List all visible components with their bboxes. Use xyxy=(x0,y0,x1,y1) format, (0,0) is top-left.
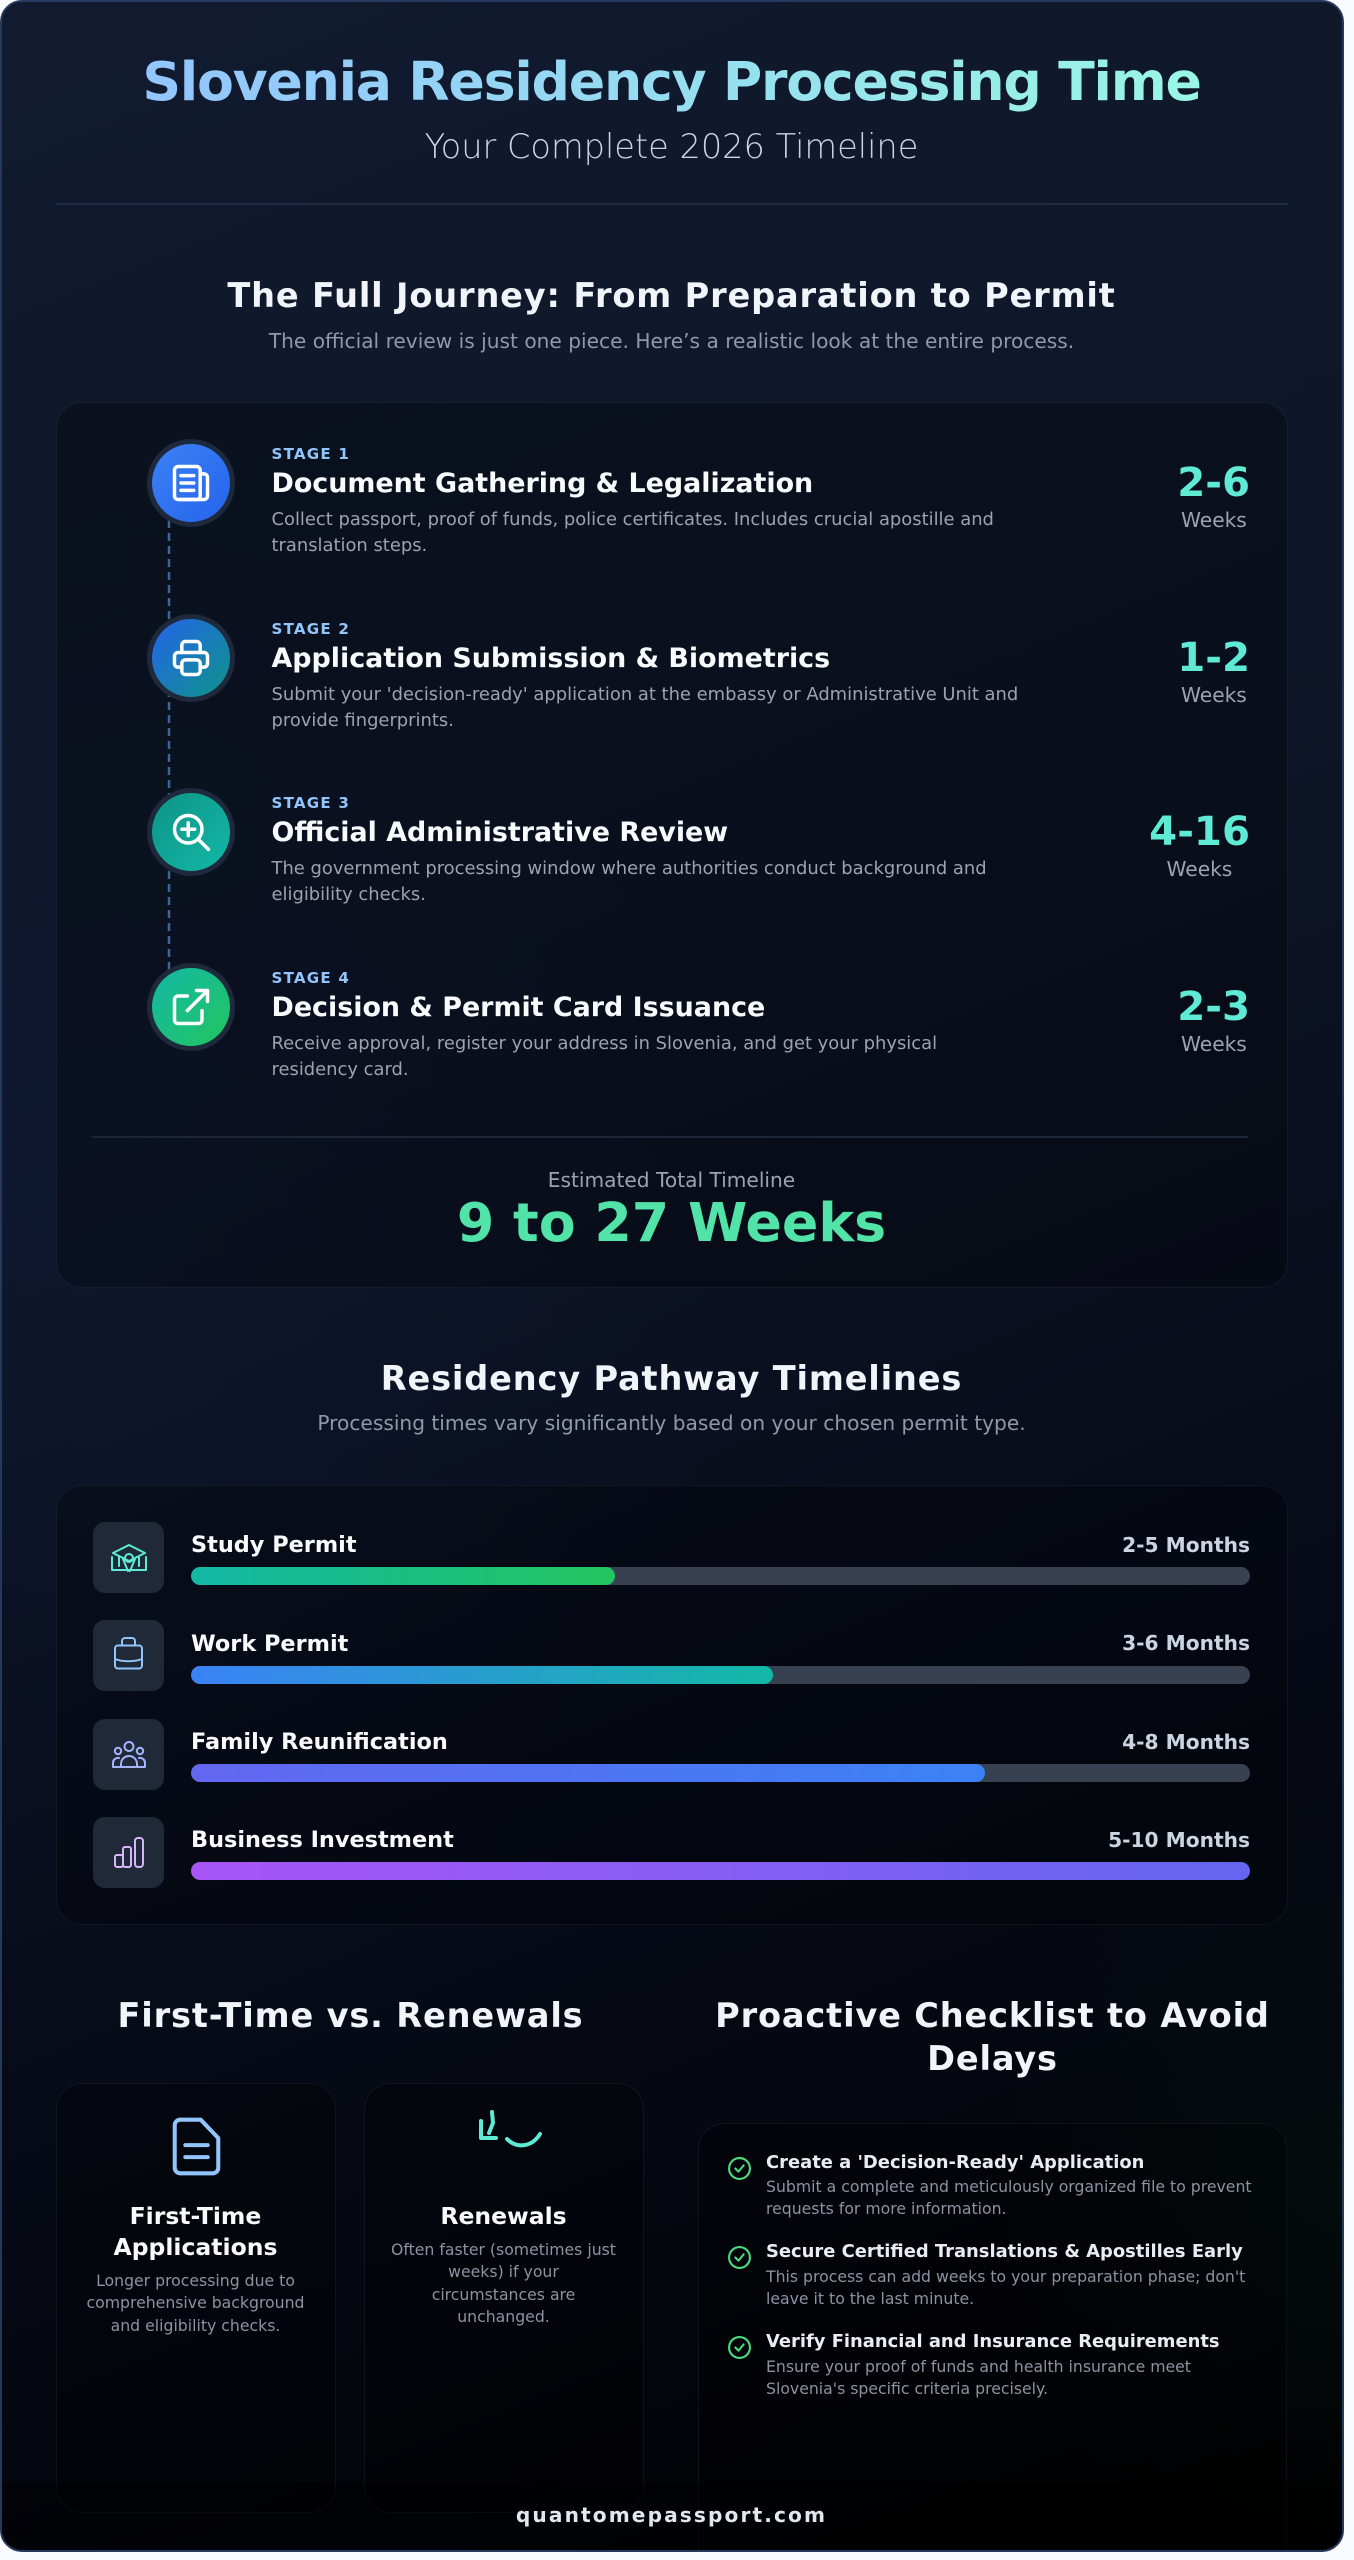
icon: people xyxy=(92,1718,164,1790)
stage description: residency card. xyxy=(272,1059,409,1080)
stage title: Document Gathering & Legalization xyxy=(272,468,813,499)
card description: circumstances are xyxy=(432,2284,575,2304)
panel: renewals xyxy=(364,2082,644,2512)
icon: check xyxy=(728,2336,751,2359)
item description: Slovenia's specific criteria precisely. xyxy=(766,2379,1048,2398)
item description: Submit a complete and meticulously organized file to prevent xyxy=(766,2177,1252,2196)
pathway duration: 3-6 Months xyxy=(1122,1631,1250,1655)
item description: This process can add weeks to your preparation phase; don't xyxy=(766,2266,1245,2286)
check item 1 xyxy=(728,2152,1252,2218)
stage duration: 2-3 xyxy=(1177,982,1250,1030)
stage label: STAGE 1 xyxy=(272,445,350,463)
title: Slovenia Residency Processing Time xyxy=(142,50,1201,112)
icon: check xyxy=(728,2157,751,2180)
stage 2 xyxy=(147,614,1250,731)
icon: graduation cap xyxy=(92,1522,164,1592)
progress bar xyxy=(191,1862,1250,1880)
card description: weeks) if your xyxy=(448,2262,559,2281)
pathway duration: 5-10 Months xyxy=(1108,1828,1250,1852)
total label: Estimated Total Timeline xyxy=(548,1168,795,1192)
icon: bar chart xyxy=(92,1816,164,1888)
stage description xyxy=(271,858,987,905)
icon: external link xyxy=(146,962,234,1050)
icon: printer xyxy=(146,614,234,702)
stage description: Submit your 'decision-ready' application at the embassy or Administrative Unit and xyxy=(272,684,1018,704)
total value: 9 to 27 Weeks xyxy=(457,1190,886,1254)
pathway: work xyxy=(93,1620,1250,1691)
card description xyxy=(391,2240,616,2326)
stage description: eligibility checks. xyxy=(272,884,426,905)
stage description: Receive approval, register your address in Slovenia, and get your physical xyxy=(272,1032,937,1054)
timeline connector xyxy=(168,520,170,970)
item description: Ensure your proof of funds and health insurance meet xyxy=(766,2356,1191,2376)
item description xyxy=(766,2177,1252,2218)
subtitle: Your Complete 2026 Timeline xyxy=(425,127,918,166)
stage description xyxy=(272,684,1018,731)
icon: magnifier xyxy=(146,788,234,876)
pathway: family xyxy=(93,1719,1250,1790)
item title: Verify Financial and Insurance Requirements xyxy=(766,2331,1220,2352)
progress bar xyxy=(191,1567,1250,1585)
pathway duration: 2-5 Months xyxy=(1122,1532,1250,1556)
icon: file xyxy=(172,2118,220,2176)
card description: unchanged. xyxy=(457,2307,550,2326)
icon: check xyxy=(728,2246,751,2269)
duration unit: Weeks xyxy=(1181,1032,1247,1056)
stage label: STAGE 4 xyxy=(272,969,350,987)
duration unit: Weeks xyxy=(1166,856,1232,880)
card description: and eligibility checks. xyxy=(111,2316,280,2334)
stage title: Official Administrative Review xyxy=(272,817,728,848)
check item 2 xyxy=(728,2241,1245,2308)
card title xyxy=(114,2202,277,2261)
stage description: Collect passport, proof of funds, police certificates. Includes crucial apostille and xyxy=(272,508,994,530)
item description xyxy=(766,2266,1245,2308)
panel: checklist xyxy=(698,2122,1287,2560)
card title: Applications xyxy=(114,2233,277,2261)
card description: comprehensive background xyxy=(86,2293,304,2312)
icon: broken refresh xyxy=(479,2110,542,2148)
pathway duration: 4-8 Months xyxy=(1122,1730,1250,1754)
progress bar xyxy=(191,1666,1250,1684)
pathway label: Business Investment xyxy=(191,1827,454,1853)
heading: first-time vs renewals: First-Time vs. Renewals xyxy=(117,1996,584,2034)
duration unit: Weeks xyxy=(1181,682,1247,706)
heading: proactive checklist: Delays xyxy=(927,2038,1058,2078)
stage description: The government processing window where authorities conduct background and xyxy=(272,858,987,878)
duration unit: Weeks xyxy=(1181,508,1247,532)
heading: proactive checklist xyxy=(715,1996,1270,2078)
item description xyxy=(766,2356,1191,2398)
header divider xyxy=(56,203,1288,205)
stage 3 xyxy=(147,788,1250,905)
heading: pathways: Residency Pathway Timelines xyxy=(381,1359,962,1398)
stage duration: 4-16 xyxy=(1149,808,1250,854)
panel: timeline xyxy=(56,402,1288,1288)
check item 3 xyxy=(728,2331,1220,2398)
stage 4 xyxy=(147,963,1250,1080)
icon: document xyxy=(146,438,234,526)
card title: Renewals xyxy=(440,2202,567,2230)
item description: leave it to the last minute. xyxy=(766,2289,974,2308)
subheading: pathways: Processing times vary significantly based on your chosen permit type. xyxy=(317,1410,1026,1434)
stage 1 xyxy=(147,439,1250,556)
stage description: translation steps. xyxy=(272,535,427,556)
pathway label: Family Reunification xyxy=(191,1729,448,1755)
icon: briefcase xyxy=(92,1620,164,1691)
stage duration: 1-2 xyxy=(1177,634,1250,680)
heading: full journey: The Full Journey: From Preparation to Permit xyxy=(227,276,1116,315)
stage title: Application Submission & Biometrics xyxy=(272,643,830,674)
item description: requests for more information. xyxy=(766,2199,1006,2218)
stage description xyxy=(272,508,994,556)
pathway: business xyxy=(93,1817,1250,1888)
card description: Longer processing due to xyxy=(96,2270,295,2290)
pathway: study xyxy=(93,1522,1250,1593)
item title: Create a 'Decision-Ready' Application xyxy=(766,2152,1144,2172)
stage title: Decision & Permit Card Issuance xyxy=(272,992,765,1023)
stage duration: 2-6 xyxy=(1177,458,1250,506)
item title: Secure Certified Translations & Apostilles Early xyxy=(766,2241,1243,2262)
progress bar xyxy=(191,1764,1250,1782)
card description xyxy=(86,2270,304,2334)
pathway label: Study Permit xyxy=(191,1532,357,1558)
card title: First-Time xyxy=(130,2202,261,2230)
timeline divider xyxy=(92,1136,1248,1138)
panel: pathways xyxy=(56,1484,1288,1924)
stage label: STAGE 3 xyxy=(272,794,350,812)
stage description xyxy=(272,1032,937,1080)
heading: proactive checklist: Proactive Checklist to Avoid xyxy=(715,1996,1270,2034)
stage description: provide fingerprints. xyxy=(272,710,454,731)
stage label: STAGE 2 xyxy=(272,620,350,638)
footer bar xyxy=(0,2482,1344,2552)
pathway label: Work Permit xyxy=(191,1630,348,1656)
footer brand: quantomepassport.com xyxy=(516,2503,827,2527)
card description: Often faster (sometimes just xyxy=(391,2240,616,2258)
panel: first-time applications xyxy=(56,2082,336,2512)
subheading: full journey: The official review is just one piece. Here’s a realistic look at the entire process. xyxy=(269,328,1074,352)
